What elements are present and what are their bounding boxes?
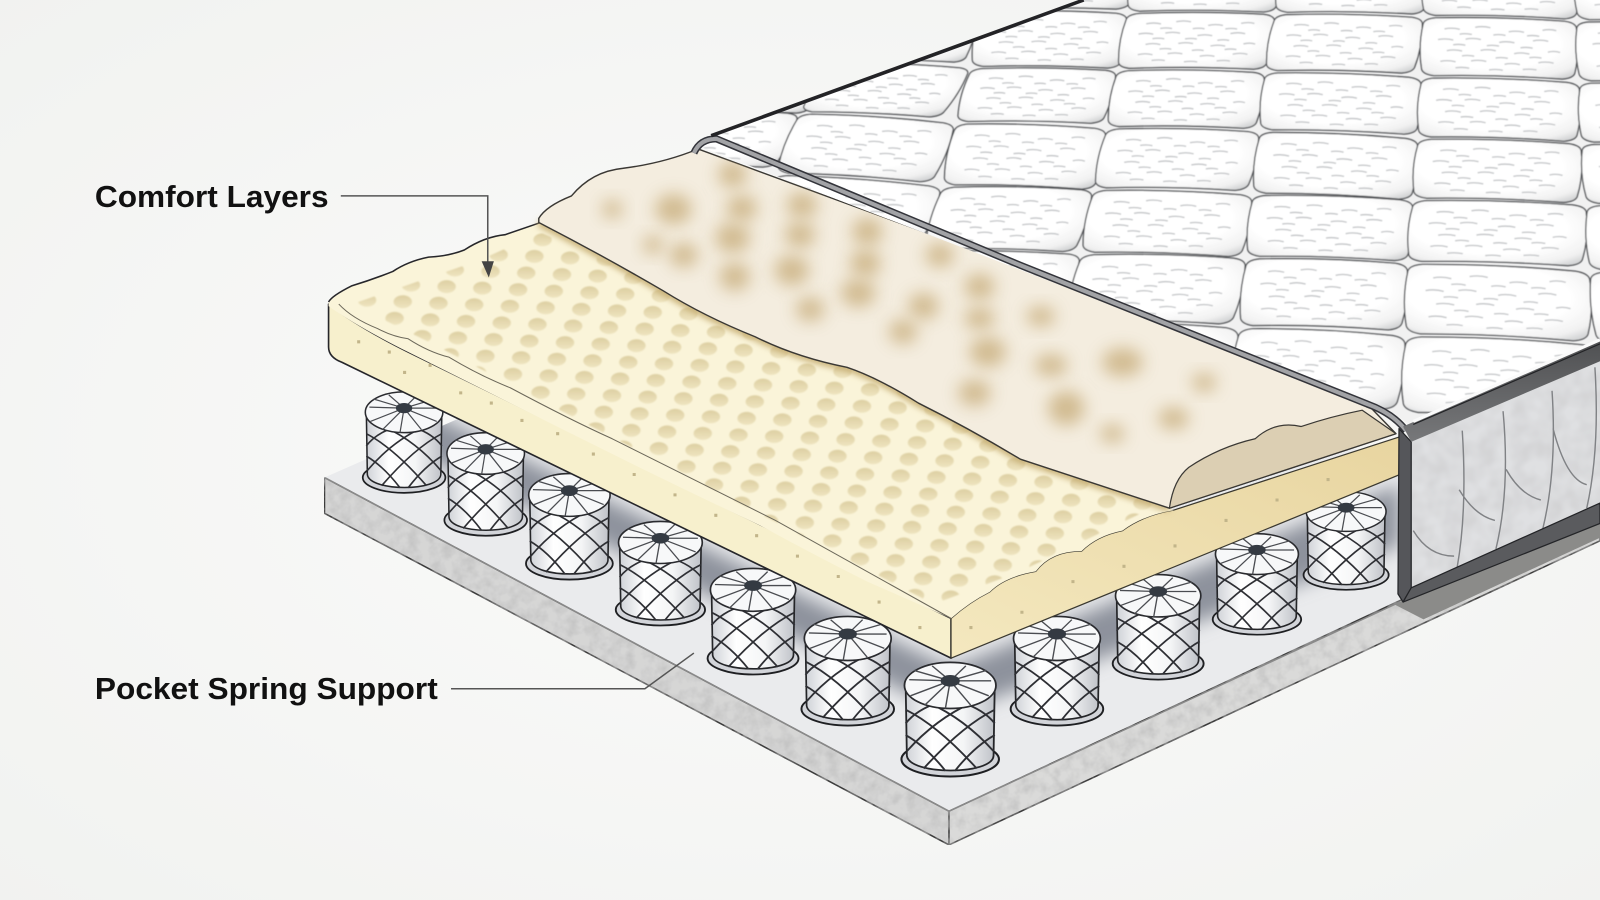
spring 6: [801, 616, 894, 726]
leader line: [341, 196, 488, 267]
shadow along comfort edge: [539, 222, 1169, 508]
foam right face: [951, 437, 1400, 658]
callout: pocket spring support: [95, 653, 694, 706]
spring front: [901, 662, 999, 777]
bottom side band: [1403, 503, 1600, 602]
spring 2: [444, 433, 527, 536]
corner upright: [1398, 429, 1411, 602]
quilt panels: [620, 0, 1600, 421]
dimpled comfort foam: [539, 149, 1396, 508]
top side band: [1403, 340, 1600, 442]
foam speckles: [357, 342, 1330, 628]
pocket springs: [363, 392, 1389, 777]
quilted top surface: [704, 0, 1600, 414]
quilted mattress: [620, 0, 1600, 602]
mattress frame: [694, 0, 1600, 602]
label: pocket spring support: Pocket Spring Support: [95, 672, 438, 706]
spring right row 4: [1011, 616, 1103, 726]
foam back edge: [329, 222, 541, 302]
arrowhead: [482, 261, 494, 278]
callout: comfort layers: [95, 180, 494, 278]
spring 3: [526, 474, 613, 580]
foam left face: [329, 304, 951, 658]
label: comfort layers: Comfort Layers: [95, 180, 329, 214]
latex foam comfort layer: [329, 222, 1400, 658]
spring 1: [363, 392, 445, 493]
comfort cut face: [1169, 410, 1396, 508]
quilt row 6: [1174, 323, 1586, 414]
leader line: [451, 653, 694, 689]
quilt row 5: [968, 250, 1600, 342]
foam holes: [352, 233, 1158, 604]
quilt row 3: [702, 112, 1600, 205]
comfort dimples: [602, 161, 1216, 443]
top left edge: [711, 0, 1084, 136]
foam top surface: [329, 222, 1173, 618]
quilt row 4: [748, 173, 1600, 275]
quilt row 0: [1064, 0, 1600, 22]
quilt row 1: [920, 10, 1600, 82]
base board: [324, 419, 1600, 845]
front edge band: [694, 139, 1406, 431]
spring 5: [708, 568, 799, 674]
mattress side panel: [1411, 361, 1600, 588]
foam crease: [339, 304, 951, 618]
spring right row 1: [1304, 492, 1389, 590]
spring 4: [616, 521, 705, 626]
spring right row 3: [1113, 575, 1204, 680]
spring right row 2: [1213, 534, 1301, 635]
comfort top surface: [539, 149, 1396, 508]
quilt row 2: [780, 64, 1600, 144]
